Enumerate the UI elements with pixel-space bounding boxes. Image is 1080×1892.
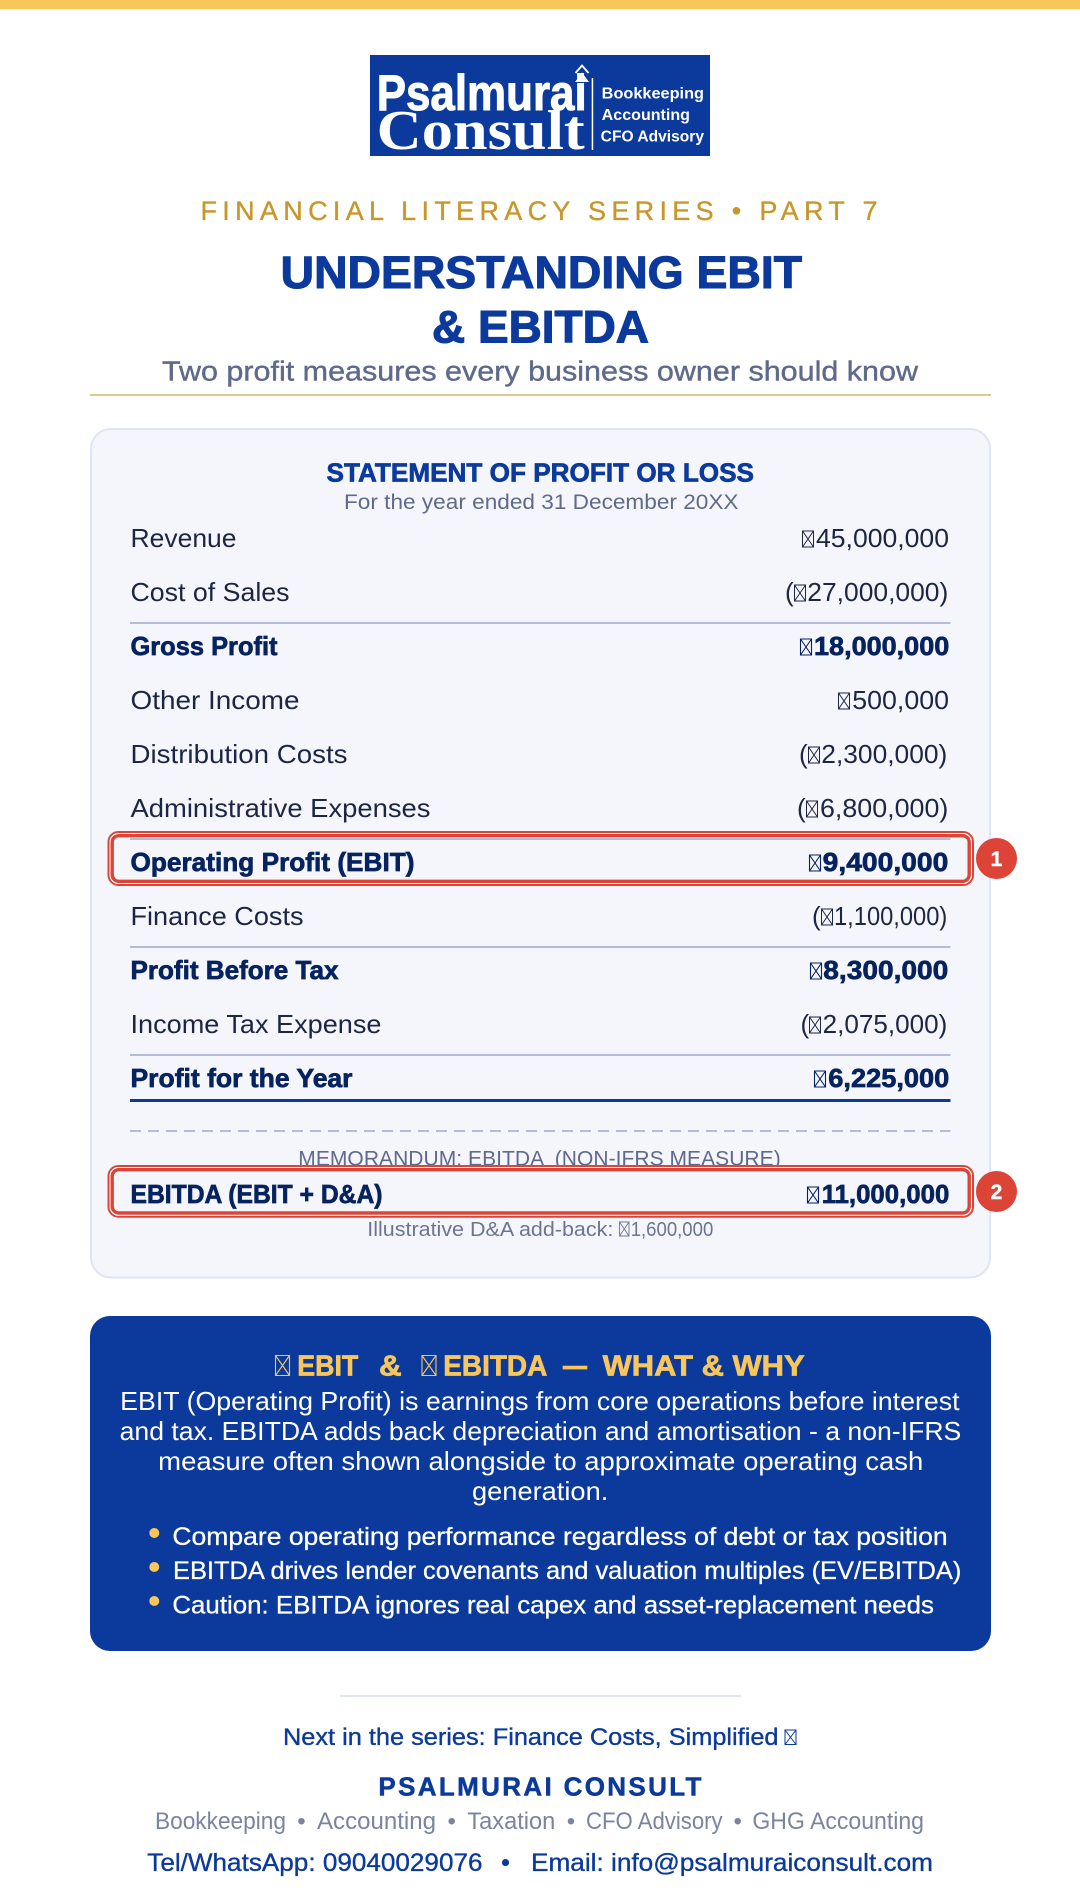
footer services: Bookkeeping xyxy=(155,1808,286,1835)
row: Operating Profit (EBIT): 9,400,000 xyxy=(823,847,948,877)
next in series: Next in the series: Finance Costs, Simplified xyxy=(283,1724,778,1751)
row: Distribution Costs xyxy=(130,739,947,769)
footer services: Accounting xyxy=(317,1808,436,1835)
bullet list: EBITDA drives lender covenants and valuation multiples (EV/EBITDA) xyxy=(173,1557,961,1585)
panel explanation: measure often shown alongside to approximate operating cash xyxy=(158,1446,923,1476)
row: Distribution Costs: Distribution Costs xyxy=(130,739,348,769)
row: Income Tax Expense: 2,075,000) xyxy=(823,1009,947,1039)
footer contact: • xyxy=(501,1849,510,1877)
row: Distribution Costs: ( xyxy=(799,739,808,769)
row: Finance Costs: 1,100,000) xyxy=(834,901,947,931)
row: Finance Costs: ( xyxy=(812,901,821,931)
bullet list: Caution: EBITDA ignores real capex and asset-replacement needs xyxy=(172,1592,934,1620)
row: Operating Profit (EBIT): Operating Profit (EBIT) xyxy=(130,847,414,877)
row: Administrative Expenses xyxy=(130,793,948,823)
row: Revenue xyxy=(130,523,949,553)
row: Profit for the Year xyxy=(130,1063,949,1093)
badge 1 xyxy=(976,838,1017,879)
footer services: Taxation xyxy=(467,1808,555,1835)
row: Distribution Costs: 2,300,000) xyxy=(821,739,947,769)
card background xyxy=(91,429,990,1278)
row: Administrative Expenses: 6,800,000) xyxy=(820,793,948,823)
row: Finance Costs xyxy=(130,901,947,931)
footer services: • xyxy=(567,1808,575,1835)
panel heading: & xyxy=(379,1351,402,1383)
row: Profit Before Tax xyxy=(130,955,948,985)
panel explanation: generation. xyxy=(472,1476,608,1506)
row: Profit for the Year: 6,225,000 xyxy=(828,1063,949,1093)
row: Gross Profit: Gross Profit xyxy=(130,631,278,661)
row: Revenue: 45,000,000 xyxy=(816,523,949,553)
row: EBITDA xyxy=(130,1179,949,1209)
statement period: For the year ended 31 December 20XX xyxy=(344,491,738,514)
logo: Psalmurai Consult: Accounting xyxy=(602,107,690,124)
row: Cost of Sales: Cost of Sales xyxy=(130,577,290,607)
logo: Psalmurai Consult: Psalmurai xyxy=(377,65,587,121)
row: Gross Profit xyxy=(130,631,949,661)
panel: what and why xyxy=(90,1316,991,1651)
highlight: EBIT row xyxy=(108,832,973,885)
footer services: CFO Advisory xyxy=(586,1808,723,1835)
panel heading: — xyxy=(563,1351,587,1383)
logo: Psalmurai Consult: Consult xyxy=(377,100,585,162)
row: Profit Before Tax: Profit Before Tax xyxy=(130,955,339,985)
panel heading: WHAT & WHY xyxy=(603,1351,805,1383)
bullet list xyxy=(149,1523,961,1620)
panel heading: EBIT xyxy=(297,1351,359,1383)
row: Cost of Sales xyxy=(130,577,948,607)
D&A add-back note xyxy=(367,1219,713,1241)
panel heading: EBITDA xyxy=(443,1351,547,1383)
row: Gross Profit: 18,000,000 xyxy=(814,631,949,661)
row: Revenue: Revenue xyxy=(130,523,236,553)
panel heading xyxy=(276,1351,805,1383)
eyebrow: series label: FINANCIAL LITERACY SERIES • PART 7 xyxy=(200,196,878,226)
row: Cost of Sales: ( xyxy=(785,577,794,607)
row: Income Tax Expense: Income Tax Expense xyxy=(130,1009,382,1039)
row: EBITDA: EBITDA (EBIT + D&A) xyxy=(130,1179,382,1209)
row: Profit Before Tax: 8,300,000 xyxy=(823,955,948,985)
title: & EBITDA xyxy=(432,302,649,353)
logo: Psalmurai Consult xyxy=(370,55,710,162)
footer services: • xyxy=(733,1808,742,1835)
title xyxy=(281,247,802,353)
row: Other Income: 500,000 xyxy=(852,685,949,715)
panel explanation xyxy=(120,1386,961,1506)
title: UNDERSTANDING EBIT xyxy=(281,247,802,298)
row: Other Income xyxy=(130,685,949,715)
badge 1: 1 xyxy=(991,848,1003,871)
top accent bar xyxy=(0,0,1080,9)
footer services: • xyxy=(297,1808,306,1835)
badge 2: 2 xyxy=(991,1181,1002,1204)
footer services: GHG Accounting xyxy=(752,1808,924,1835)
highlight: EBITDA row xyxy=(108,1166,973,1217)
row: Income Tax Expense xyxy=(130,1009,947,1039)
blue panel background xyxy=(90,1316,991,1651)
logo: Psalmurai Consult: CFO Advisory xyxy=(601,129,704,146)
footer contact: Tel/WhatsApp: 09040029076 xyxy=(147,1849,483,1877)
row: Finance Costs: Finance Costs xyxy=(130,901,304,931)
statement heading: STATEMENT OF PROFIT OR LOSS xyxy=(326,458,754,488)
footer contact xyxy=(147,1849,933,1877)
panel explanation: EBIT (Operating Profit) is earnings from core operations before interest xyxy=(120,1386,960,1416)
footer services xyxy=(155,1808,924,1835)
row: Cost of Sales: 27,000,000) xyxy=(807,577,948,607)
footer contact: Email: info@psalmuraiconsult.com xyxy=(531,1849,933,1877)
panel: statement of profit or loss xyxy=(91,429,1017,1278)
D&A add-back note: Illustrative D&A add-back: xyxy=(367,1219,613,1241)
badge 2 xyxy=(976,1171,1017,1212)
bullet list: Compare operating performance regardless of debt or tax position xyxy=(172,1523,948,1551)
row: Income Tax Expense: ( xyxy=(800,1009,810,1039)
row: EBITDA: 11,000,000 xyxy=(822,1179,949,1209)
row: Administrative Expenses: Administrative Expenses xyxy=(130,793,430,823)
row: Administrative Expenses: ( xyxy=(797,793,806,823)
D&A add-back note: 1,600,000 xyxy=(631,1219,713,1241)
subtitle: Two profit measures every business owner should know xyxy=(162,356,919,387)
row: Operating Profit (EBIT) xyxy=(130,847,948,877)
row: Other Income: Other Income xyxy=(130,685,300,715)
footer services: • xyxy=(447,1808,456,1835)
memorandum label: MEMORANDUM: EBITDA (NON-IFRS MEASURE) xyxy=(298,1148,781,1171)
panel explanation: and tax. EBITDA adds back depreciation and amortisation - a non-IFRS xyxy=(120,1416,961,1446)
row: Profit for the Year: Profit for the Year xyxy=(130,1063,352,1093)
footer brand: PSALMURAI CONSULT xyxy=(378,1772,702,1802)
logo: Psalmurai Consult: Bookkeeping xyxy=(602,85,704,102)
